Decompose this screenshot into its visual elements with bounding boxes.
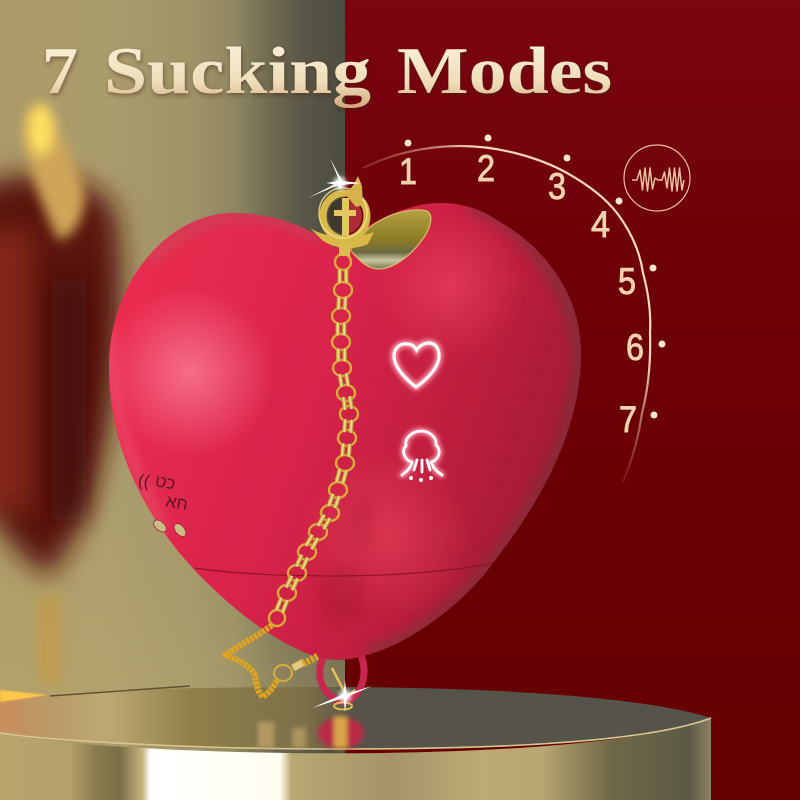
clasp ring <box>274 665 292 681</box>
title <box>42 34 612 108</box>
background: gold wall <box>0 0 346 800</box>
mode 7: 7 <box>619 399 637 440</box>
arc dial <box>363 146 650 482</box>
charging contacts <box>151 518 188 539</box>
heart shading <box>100 200 590 670</box>
podium rim highlight <box>0 718 711 749</box>
charm inner field <box>328 198 362 234</box>
twisted chain end <box>225 625 277 697</box>
podium top surface <box>0 687 711 749</box>
gold charm ornament <box>310 176 374 256</box>
right-edge shadow <box>367 205 581 655</box>
seam line <box>195 563 493 576</box>
marbled dark patches <box>320 566 364 622</box>
icon: glowing heart button <box>394 343 439 387</box>
heart body <box>109 203 581 660</box>
mode 6: 6 <box>626 327 644 368</box>
charm neck <box>339 244 350 256</box>
podium side <box>0 718 711 800</box>
dial dots <box>404 134 666 418</box>
heart engraved logo: כט <box>154 471 177 494</box>
charm ring <box>323 193 367 239</box>
left rim light <box>111 330 165 530</box>
top sheen <box>150 216 320 262</box>
sparkle: top <box>308 158 362 198</box>
title numeral: 7 <box>42 34 78 108</box>
title word: Sucking: Sucking <box>104 34 371 108</box>
mode 5: 5 <box>618 261 636 302</box>
background: dark red wall <box>345 0 800 800</box>
heart engraved logo <box>134 468 192 514</box>
heart engraved logo: (( <box>137 470 152 491</box>
gold chain <box>225 254 358 697</box>
flame highlight <box>25 105 85 240</box>
chain rings <box>269 254 358 626</box>
dial numbers <box>399 148 644 440</box>
mode 4: 4 <box>591 204 610 245</box>
blurred background heart <box>0 104 121 685</box>
gold glint at left of podium <box>0 690 48 702</box>
charm flange <box>310 228 374 248</box>
bottom loop <box>320 652 364 710</box>
icon: waveform in circle <box>624 145 690 211</box>
gold locket lid <box>350 210 431 269</box>
charm figure <box>334 198 356 236</box>
title word: Modes: Modes <box>397 34 612 108</box>
chain double bars <box>274 270 354 613</box>
mode 1: 1 <box>399 151 417 192</box>
clasp end coil <box>303 656 318 664</box>
clasp bar <box>293 662 304 668</box>
charm crown <box>346 176 363 207</box>
icon: glowing suction button <box>402 431 442 482</box>
sparkle: bottom <box>312 680 372 712</box>
wall base line <box>50 686 190 696</box>
heart product <box>100 200 590 710</box>
podium <box>0 686 711 800</box>
mode 2: 2 <box>477 148 495 189</box>
heart reflection <box>258 716 364 749</box>
heart engraved logo: חא <box>164 492 189 514</box>
mode 3: 3 <box>548 166 566 207</box>
